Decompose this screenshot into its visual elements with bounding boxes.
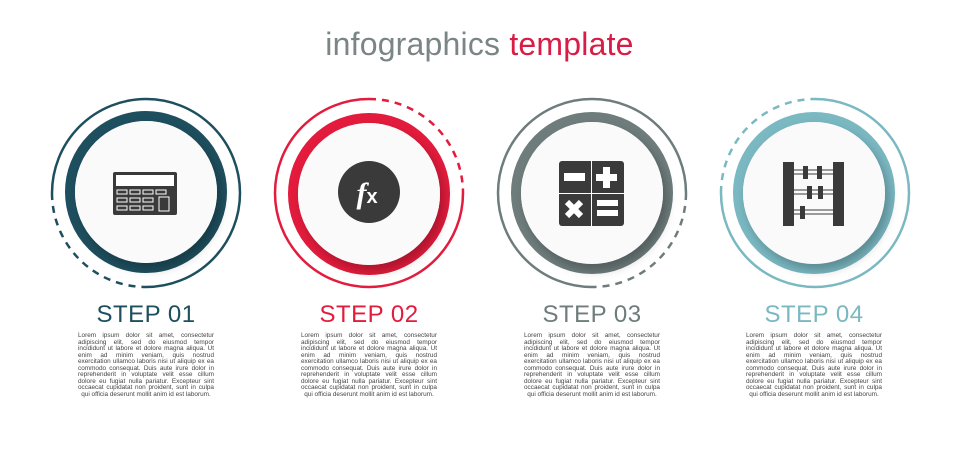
circle step 4 [721,99,909,287]
step 02 text block: STEP 02 [319,301,419,328]
step 04 text block [746,301,882,398]
circle step 1 [52,99,240,287]
step 01 text block [78,301,214,398]
step 04 text block: STEP 04 [764,301,864,328]
step 03 text block: Lorem ipsum dolor sit amet, consectetur adipiscing elit, sed do eiusmod tempor incididunt ut labore et dolore magna aliqua. Ut enim ad minim veniam, quis nostrud exercitation ullamco laboris nisi ut aliquip ex ea commodo consequat. Duis aute irure dolor in reprehenderit in voluptate velit esse cillum dolore eu fugiat nulla pariatur. Excepteur sint occaecat cupidatat non proident, sunt in culpa qui officia deserunt mollit anim id est laborum. [524,332,660,398]
step 03 text block: STEP 03 [542,301,642,328]
step 01 text block: Lorem ipsum dolor sit amet, consectetur adipiscing elit, sed do eiusmod tempor incididunt ut labore et dolore magna aliqua. Ut enim ad minim veniam, quis nostrud exercitation ullamco laboris nisi ut aliquip ex ea commodo consequat. Duis aute irure dolor in reprehenderit in voluptate velit esse cillum dolore eu fugiat nulla pariatur. Excepteur sint occaecat cupidatat non proident, sunt in culpa qui officia deserunt mollit anim id est laborum. [78,332,214,398]
step 04 text block: Lorem ipsum dolor sit amet, consectetur adipiscing elit, sed do eiusmod tempor incididunt ut labore et dolore magna aliqua. Ut enim ad minim veniam, quis nostrud exercitation ullamco laboris nisi ut aliquip ex ea commodo consequat. Duis aute irure dolor in reprehenderit in voluptate velit esse cillum dolore eu fugiat nulla pariatur. Excepteur sint occaecat cupidatat non proident, sunt in culpa qui officia deserunt mollit anim id est laborum. [746,332,882,398]
icon: fx: fx [356,177,378,210]
step 02 text block: Lorem ipsum dolor sit amet, consectetur adipiscing elit, sed do eiusmod tempor incididunt ut labore et dolore magna aliqua. Ut enim ad minim veniam, quis nostrud exercitation ullamco laboris nisi ut aliquip ex ea commodo consequat. Duis aute irure dolor in reprehenderit in voluptate velit esse cillum dolore eu fugiat nulla pariatur. Excepteur sint occaecat cupidatat non proident, sunt in culpa qui officia deserunt mollit anim id est laborum. [301,332,437,398]
step 02 text block [301,301,437,398]
circle step 3 [498,99,686,287]
icon: math operations [559,161,624,226]
icon: fx [338,161,400,223]
icon: abacus [783,162,844,226]
step 03 text block [524,301,660,398]
title: infographics template [325,26,634,62]
circle step 2 [275,99,463,287]
step 01 text block: STEP 01 [96,301,196,328]
icon: calculator [113,172,177,215]
